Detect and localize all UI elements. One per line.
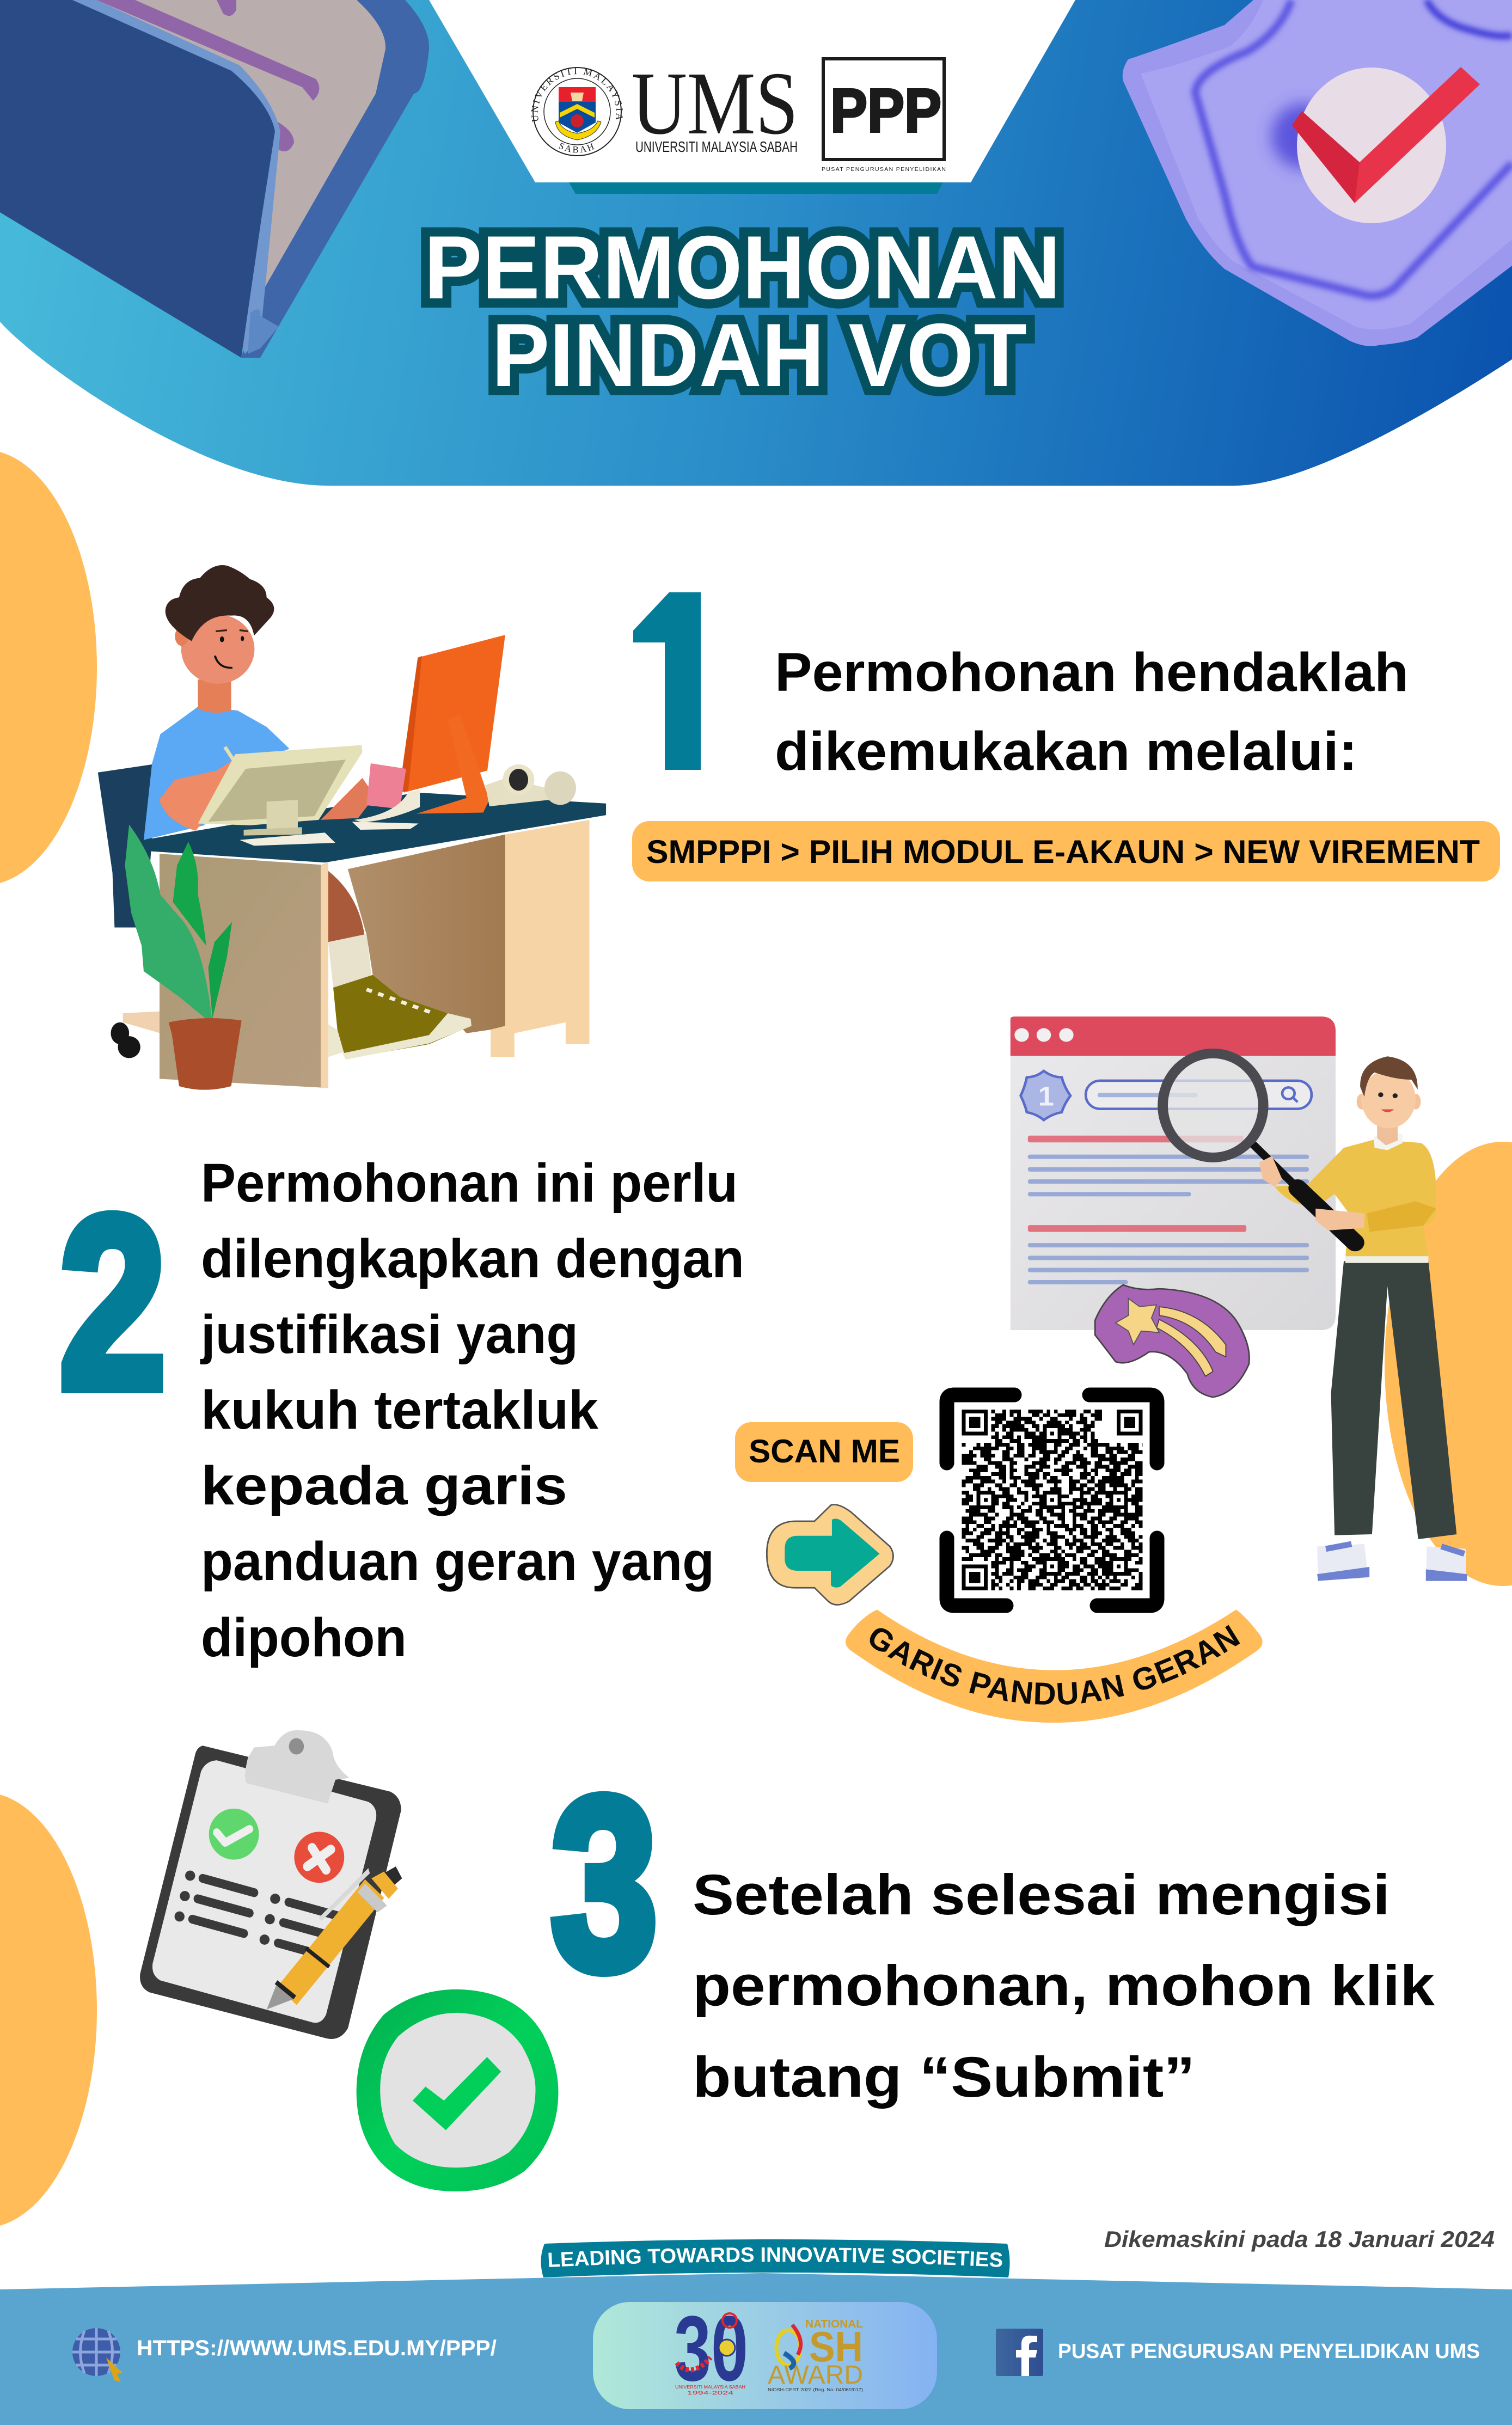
logo: national OSH award — [768, 2318, 863, 2392]
step 1 text: Permohonan hendaklah — [775, 642, 1409, 703]
UMS wordmark: UMS — [632, 53, 798, 153]
step 3 text: Setelah selesai mengisi — [693, 1863, 1390, 1927]
facebook link: PUSAT PENGURUSAN PENYELIDIKAN UMS — [1058, 2340, 1480, 2363]
arc label: garis panduan geran: GARIS PANDUAN GERAN — [870, 1625, 1240, 1705]
PPP logo: PPP — [830, 76, 941, 145]
UMS wordmark: UNIVERSITI MALAYSIA SABAH — [635, 138, 798, 155]
logo: 30th anniversary: 30 — [674, 2297, 748, 2400]
illustration: man at desk — [98, 565, 606, 1090]
logo: national OSH award: NATIONAL — [805, 2318, 863, 2330]
logo: 30th anniversary: 1994-2024 — [687, 2390, 733, 2396]
title — [424, 217, 1061, 405]
step 1 path pill — [632, 821, 1500, 881]
logo panel — [429, 0, 1075, 194]
logo: national OSH award: SH — [809, 2323, 863, 2371]
step 2 text: Permohonan ini perlu — [201, 1153, 738, 1214]
logo: 30th anniversary: UNIVERSITI MALAYSIA SABAH — [675, 2385, 745, 2390]
number 1: 1 — [626, 535, 730, 876]
icon: shooting star sticker — [1095, 1285, 1249, 1397]
tagline banner: LEADING TOWARDS INNOVATIVE SOCIETIES — [548, 2248, 1002, 2267]
decorative blob left top — [0, 450, 97, 885]
logo: national OSH award: AWARD — [768, 2361, 863, 2390]
PPP logo: PUSAT PENGURUSAN PENYELIDIKAN — [822, 166, 946, 173]
step 2 text: kukuh tertakluk — [201, 1380, 598, 1441]
footer band — [0, 2273, 1512, 2425]
UMS crest — [531, 67, 623, 156]
step 2 text: dilengkapkan dengan — [201, 1228, 744, 1289]
title: PINDAH VOT — [492, 305, 1027, 405]
facebook link — [996, 2329, 1480, 2376]
browser window: 1 — [1038, 1081, 1054, 1111]
step 2 text: justifikasi yang — [200, 1304, 578, 1365]
step 1 text — [775, 642, 1409, 782]
step 3 text: permohonan, mohon klik — [693, 1954, 1435, 2018]
illustration: browser window and man with magnifier — [767, 1016, 1467, 1723]
icon: facebook — [996, 2329, 1043, 2376]
decorative blob right — [1385, 1142, 1512, 1586]
website link: HTTPS://WWW.UMS.EDU.MY/PPP/ — [137, 2336, 497, 2360]
icon: green tick button — [357, 1989, 558, 2191]
step 2 text: kepada garis — [201, 1455, 567, 1516]
step 2 text — [200, 1153, 744, 1668]
illustration: clipboard with pen — [140, 1730, 402, 2039]
scan me pill: SCAN ME — [749, 1433, 900, 1469]
icon: shield with tick — [1123, 0, 1512, 346]
update date: Dikemaskini pada 18 Januari 2024 — [1104, 2226, 1495, 2252]
icon: globe — [72, 2328, 123, 2382]
logo: national OSH award: NIOSH-CERT 2022 (Reg. No: 04/06/2017) — [768, 2387, 863, 2392]
icon: folder — [0, 0, 429, 358]
man — [1275, 1056, 1467, 1581]
browser window — [1011, 1016, 1336, 1330]
second QR layer: right-hand columns — [1110, 1411, 1146, 1589]
UMS crest: UNIVERSITI MALAYSIA — [531, 68, 623, 122]
step 2 text: dipohon — [201, 1607, 407, 1668]
step 3 text: butang “Submit” — [693, 2046, 1195, 2109]
header banner — [0, 0, 1512, 486]
PPP logo — [822, 59, 946, 173]
scan me pill — [735, 1422, 913, 1482]
icon: arrow sticker — [767, 1505, 893, 1605]
website link — [72, 2328, 497, 2382]
icon: magnifier — [1163, 1054, 1364, 1242]
anniversary and OSH award logos panel — [593, 2297, 937, 2409]
step 2 text: panduan geran yang — [201, 1531, 714, 1592]
step 3 text — [693, 1863, 1435, 2109]
decorative blob left bottom — [0, 1792, 97, 2228]
UMS crest: SABAH — [559, 143, 595, 152]
QR code with frame — [947, 1395, 1157, 1606]
step 1 path pill: SMPPPI > PILIH MODUL E-AKAUN > NEW VIREMENT — [646, 834, 1480, 870]
title: PERMOHONAN — [424, 217, 1061, 317]
arc banner: garis panduan geran band — [846, 1609, 1263, 1723]
number 2: 2 — [59, 1166, 166, 1440]
step 1 text: dikemukakan melalui: — [775, 721, 1357, 782]
number 3: 3 — [551, 1747, 658, 2020]
